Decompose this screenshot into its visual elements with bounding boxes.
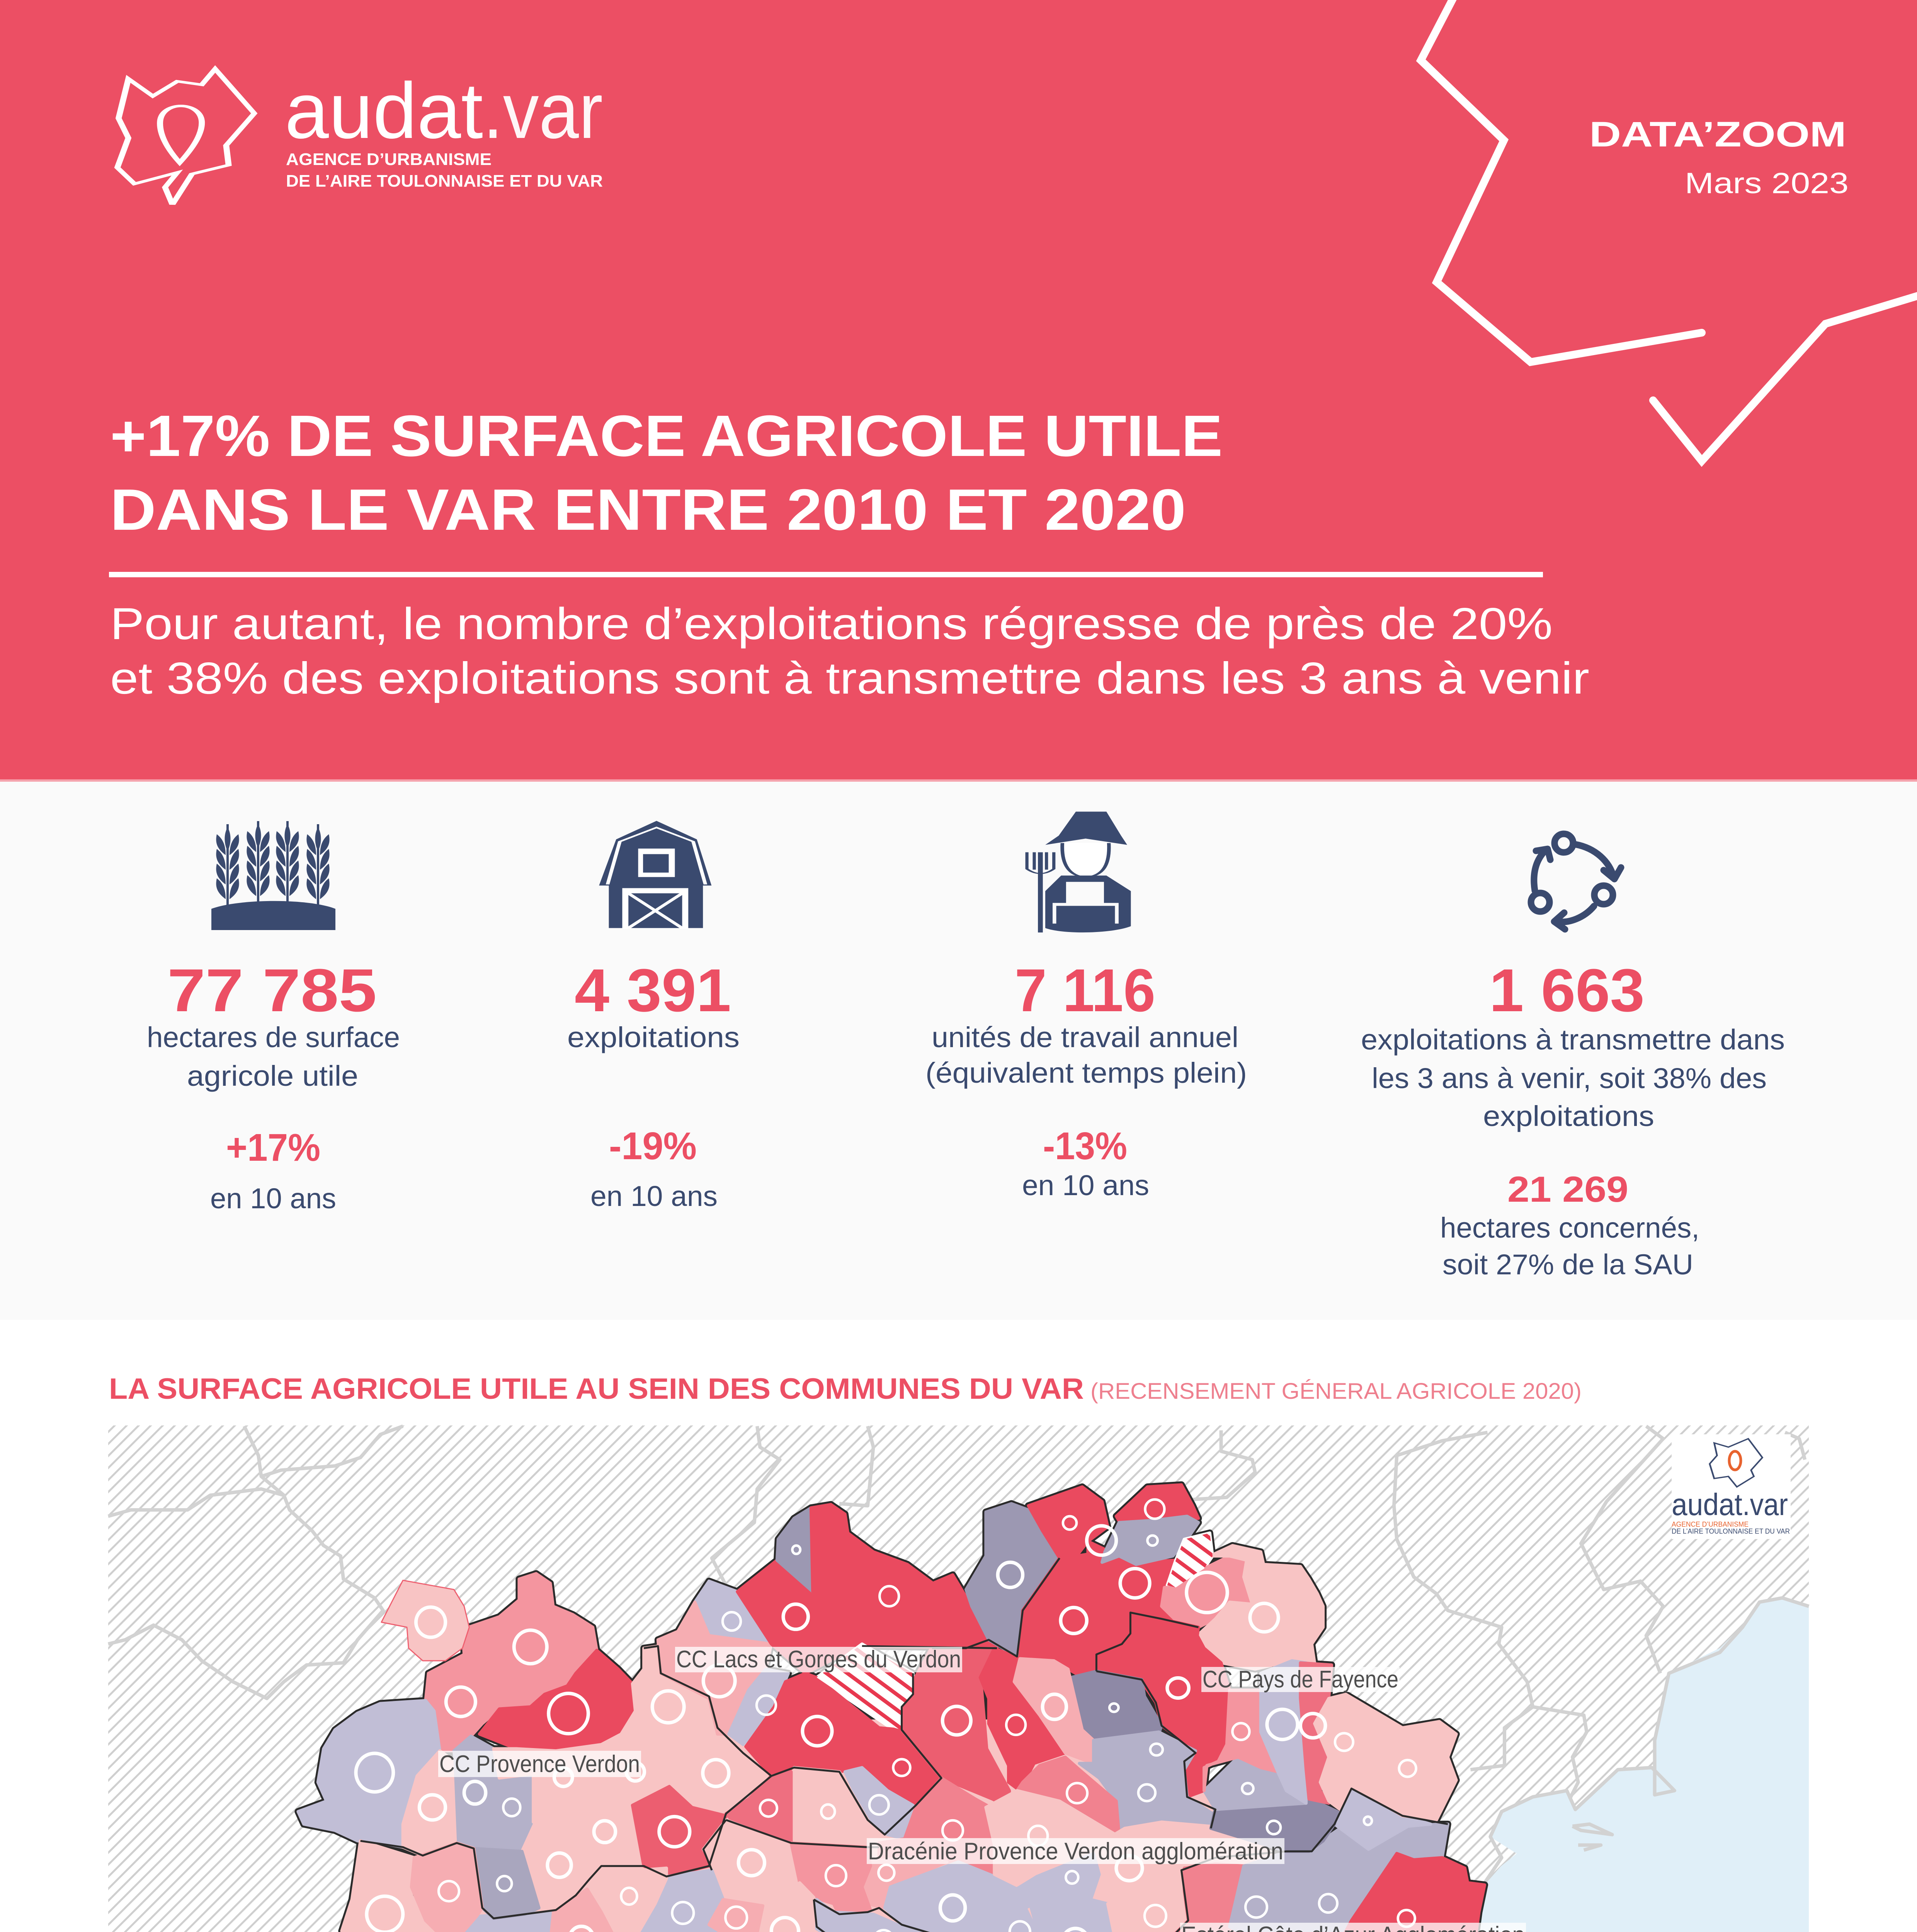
stat: exploitations: -19%	[609, 1124, 697, 1168]
title	[110, 403, 1223, 542]
map logo: DE L’AIRE TOULONNAISE ET DU VAR	[1672, 1527, 1790, 1535]
logo: audat.var: .var	[483, 66, 603, 155]
stat: work units: en 10 ans	[1022, 1169, 1149, 1201]
subtitle: et 38% des exploitations sont à transmettre dans les 3 ans à venir	[110, 653, 1589, 703]
stat: work units: unités de travail annuel	[932, 1021, 1238, 1053]
label: CC Provence Verdon: CC Provence Verdon	[439, 1751, 640, 1777]
stat: transmission: exploitations à transmettre dans	[1361, 1024, 1785, 1056]
publication tag: Mars 2023	[1685, 167, 1849, 200]
subtitle	[110, 599, 1589, 703]
logo: audat.var: DE L’AIRE TOULONNAISE ET DU VAR	[286, 172, 603, 190]
var interior underlay	[425, 1719, 1275, 1932]
stat: transmission: les 3 ans à venir, soit 38% des	[1372, 1062, 1767, 1094]
title: DANS LE VAR ENTRE 2010 ET 2020	[110, 477, 1186, 542]
communes outline layer	[298, 1485, 1485, 1932]
icon: barn	[599, 821, 711, 929]
stat: work units	[925, 957, 1247, 1201]
icon: transmission cycle	[1531, 834, 1621, 929]
stat: work units: (équivalent temps plein)	[925, 1057, 1247, 1089]
icon: farmer	[1027, 811, 1131, 932]
publication tag: DATA’ZOOM	[1589, 115, 1846, 154]
communes choropleth	[298, 1485, 1485, 1932]
stat: exploitations: 4 391	[575, 957, 731, 1024]
title: +17% DE SURFACE AGRICOLE UTILE	[110, 403, 1223, 468]
header band	[0, 0, 1917, 782]
stat: transmission: exploitations	[1483, 1100, 1654, 1132]
stat: hectares: hectares de surface	[147, 1021, 400, 1053]
stat: transmission	[1361, 957, 1785, 1281]
intercommunal boundaries	[321, 1558, 1448, 1932]
stat: hectares	[147, 957, 400, 1214]
label: Dracénie Provence Verdon agglomération: Dracénie Provence Verdon agglomération	[868, 1838, 1283, 1865]
map logo	[1672, 1434, 1791, 1539]
logo: audat.var: AGENCE D’URBANISME	[286, 150, 492, 169]
proportional circles	[354, 1500, 1416, 1932]
heading: map section: LA SURFACE AGRICOLE UTILE AU SEIN DES COMMUNES DU VAR	[109, 1372, 1084, 1405]
stat: exploitations: exploitations	[567, 1021, 740, 1053]
stat: hectares: agricole utile	[187, 1060, 358, 1092]
map logo: audat	[1672, 1487, 1742, 1522]
logo: audat.var: audat	[285, 66, 483, 155]
stat: hectares: 77 785	[167, 957, 377, 1024]
stat: hectares: en 10 ans	[210, 1182, 336, 1214]
decorative outline: top right	[1421, 0, 1917, 461]
stat: work units: -13%	[1043, 1124, 1127, 1168]
map logo: .var	[1742, 1487, 1788, 1522]
subtitle: Pour autant, le nombre d’exploitations régresse de près de 20%	[110, 599, 1553, 649]
stat: transmission: soit 27% de la SAU	[1442, 1248, 1693, 1281]
stat: transmission: hectares concernés,	[1440, 1212, 1699, 1244]
stat: transmission: 1 663	[1489, 957, 1645, 1024]
panel: key figures	[0, 782, 1917, 1320]
stat: work units: 7 116	[1015, 957, 1155, 1024]
label: CC Pays de Fayence: CC Pays de Fayence	[1203, 1666, 1398, 1693]
icon: wheat	[211, 821, 335, 930]
stat: hectares: +17%	[226, 1126, 320, 1169]
map logo: AGENCE D’URBANISME	[1672, 1520, 1749, 1528]
logo: audat.var	[117, 66, 603, 204]
stat: exploitations: en 10 ans	[590, 1180, 718, 1212]
heading: map section	[109, 1372, 1582, 1405]
stat: exploitations	[567, 957, 740, 1212]
neighbouring territory boundaries	[108, 1426, 1809, 1932]
stat: transmission: 21 269	[1507, 1169, 1628, 1209]
map panel	[108, 1425, 1809, 1932]
label: CC Lacs et Gorges du Verdon: CC Lacs et Gorges du Verdon	[676, 1646, 961, 1673]
heading: map section: (RECENSEMENT GÉNERAL AGRICOLE 2020)	[1090, 1379, 1582, 1404]
publication tag	[1589, 115, 1849, 200]
hatched communes: no data	[550, 1533, 1213, 1932]
communes outside the dark boundary	[332, 1580, 469, 1932]
